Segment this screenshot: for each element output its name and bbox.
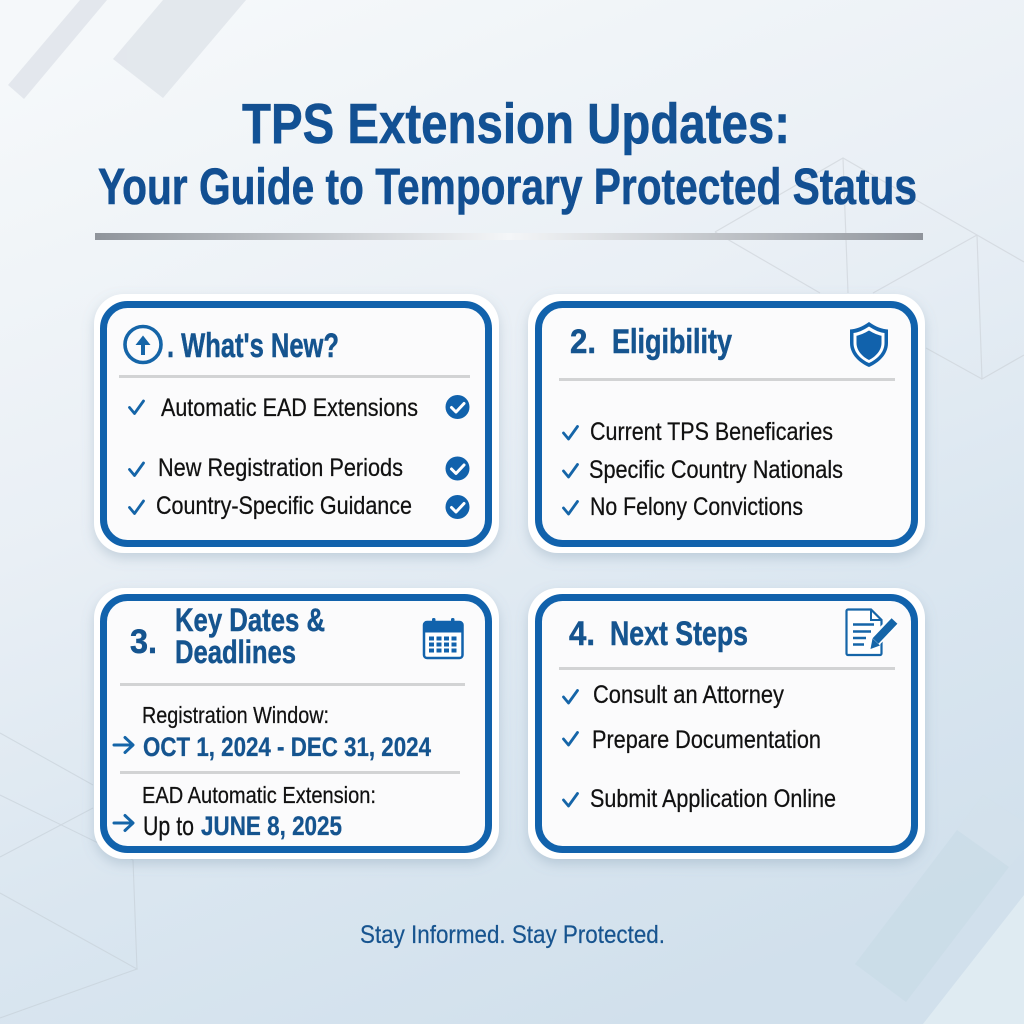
title: TPS Extension Updates: — [242, 92, 790, 156]
list: next steps items — [564, 681, 836, 813]
heading: eligibility: 2. — [570, 323, 596, 361]
icon: up arrow circle — [125, 326, 161, 362]
list: next steps items: Submit Application Online — [590, 785, 836, 813]
decorative hexagon lines bottom left — [0, 733, 137, 1018]
text: registration window — [114, 702, 431, 762]
text: registration window: OCT 1, 2024 - DEC 31, 2024 — [143, 732, 431, 762]
heading: key dates — [130, 602, 325, 670]
icons: check badges — [446, 395, 470, 519]
panel: key dates — [94, 588, 499, 859]
icon: calendar — [424, 618, 462, 658]
footer tagline: Stay Informed. Stay Protected. — [360, 921, 665, 949]
text: ead automatic extension: JUNE 8, 2025 — [201, 811, 342, 841]
list: what's new items — [130, 394, 418, 520]
list: what's new items: Country-Specific Guidance — [156, 492, 412, 520]
text: ead automatic extension: Up to — [143, 811, 194, 841]
icon: shield — [850, 322, 888, 367]
text: ead automatic extension: EAD Automatic Extension: — [142, 782, 376, 808]
heading: next steps: Next Steps — [610, 615, 748, 653]
heading: next steps: 4. — [569, 615, 595, 653]
title divider — [95, 233, 923, 240]
panel: what's new — [94, 294, 499, 553]
heading: what's new: . What's New? — [167, 327, 339, 365]
list: what's new items: Automatic EAD Extensions — [161, 394, 418, 422]
panel: next steps — [528, 588, 925, 859]
list: next steps items: Prepare Documentation — [592, 726, 821, 754]
list: what's new items: New Registration Periods — [158, 454, 403, 482]
heading: key dates: Deadlines — [175, 634, 296, 670]
title — [98, 92, 917, 215]
list: eligibility items: Specific Country Nationals — [589, 456, 843, 484]
heading: key dates: Key Dates & — [175, 602, 325, 638]
decorative bands bottom right — [855, 795, 1024, 1024]
list: eligibility items: Current TPS Beneficaries — [590, 418, 833, 446]
heading: next steps — [569, 615, 748, 653]
icon: document and pen — [846, 610, 894, 655]
list: next steps items: Consult an Attorney — [593, 681, 784, 709]
text: registration window: Registration Window: — [142, 702, 329, 728]
heading: key dates: 3. — [130, 623, 157, 661]
list: eligibility items: No Felony Convictions — [590, 493, 803, 521]
heading: eligibility — [570, 323, 732, 361]
decorative hexagon lines right — [715, 158, 1024, 379]
panel: eligibility — [528, 294, 925, 553]
list: eligibility items — [564, 418, 843, 521]
heading: eligibility: Eligibility — [612, 323, 732, 361]
decorative bands top left — [8, 0, 246, 99]
text: ead automatic extension — [114, 782, 376, 841]
